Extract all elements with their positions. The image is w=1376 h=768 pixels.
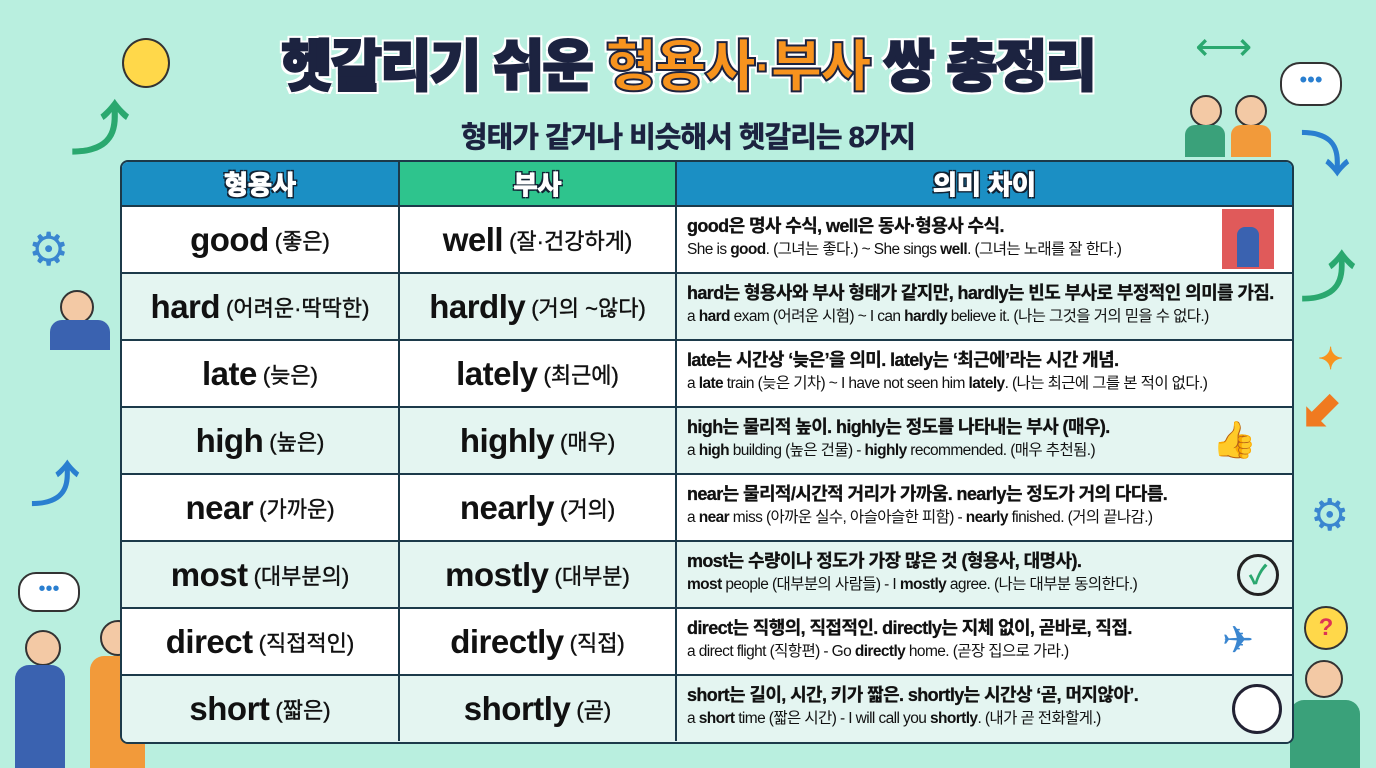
header: meaning: 의미 차이 bbox=[933, 170, 1036, 200]
row: near bbox=[122, 475, 1292, 542]
row: good: (좋은) bbox=[275, 228, 330, 254]
icon: double arrow: ⟷ bbox=[1195, 25, 1252, 69]
row: high bbox=[122, 408, 1292, 475]
icon: clock bbox=[1232, 684, 1282, 734]
row: hard: (거의 ~않다) bbox=[531, 296, 646, 320]
row: near: nearly bbox=[460, 488, 554, 526]
row: good: well bbox=[443, 220, 503, 258]
header: meaning bbox=[677, 162, 1292, 207]
row: late bbox=[122, 341, 1292, 408]
row: short: a short time (짧은 시간) - I will call you shortly. (내가 곧 전화할게.) bbox=[687, 710, 1101, 727]
row: good bbox=[122, 207, 1292, 274]
row: direct: (직접적인) bbox=[259, 630, 354, 656]
icon: check bbox=[1237, 554, 1279, 596]
row: late: (늦은) bbox=[263, 362, 318, 388]
icon: speech bubbles left bbox=[18, 572, 80, 612]
arrow: green curved left: ⤴ bbox=[70, 96, 130, 163]
subtitle: 형태가 같거나 비슷해서 헷갈리는 8가지 bbox=[461, 122, 915, 154]
row: short: (짧은) bbox=[275, 698, 331, 722]
header: adverb bbox=[400, 162, 677, 207]
row: late: late bbox=[202, 354, 257, 392]
header: adjective: 형용사 bbox=[224, 170, 296, 200]
icon: gear right: ⚙ bbox=[1310, 491, 1349, 540]
row: most: (대부분의) bbox=[254, 564, 349, 588]
title: 헷갈리기 쉬운 형용사·부사 쌍 총정리 bbox=[281, 35, 1095, 98]
icon: question bubble: ? bbox=[1319, 614, 1333, 641]
header: adjective bbox=[122, 162, 400, 207]
arrow: green right: ⤴ bbox=[1300, 246, 1356, 309]
row: direct: directly bbox=[450, 622, 564, 660]
row: high: (높은) bbox=[269, 430, 324, 454]
row: late: lately bbox=[456, 354, 538, 392]
row: short: short는 길이, 시간, 키가 짧은. shortly는 시간상 ‘곧, 머지않아’. bbox=[687, 685, 1138, 705]
row: short: (곧) bbox=[576, 698, 611, 722]
row: direct: direct bbox=[166, 622, 253, 660]
icon: speech bubble bbox=[1280, 62, 1342, 106]
row: near: near bbox=[185, 488, 253, 526]
row: late: a late train (늦은 기차) ~ I have not seen him lately. (나는 최근에 그를 본 적이 없다.) bbox=[687, 375, 1207, 392]
row: high: high bbox=[196, 422, 263, 458]
arrow: blue curved right: ⤵ bbox=[1300, 127, 1350, 183]
row: high: a high building (높은 건물) - highly recommended. (매우 추천됨.) bbox=[687, 442, 1095, 459]
arrow: blue left: ⤴ bbox=[30, 457, 80, 513]
people: bottom left bbox=[15, 620, 145, 768]
people: top right bbox=[1185, 95, 1271, 157]
row: good: (잘·건강하게) bbox=[509, 228, 632, 254]
row: good: good bbox=[190, 220, 269, 258]
row: hard bbox=[122, 274, 1292, 341]
arrow: orange right: ⬋ bbox=[1300, 382, 1342, 438]
icon: singer bbox=[1222, 209, 1274, 269]
row: near: near는 물리적/시간적 거리가 가까움. nearly는 정도가 거의 다다름. bbox=[687, 484, 1167, 504]
icon: question bubble bbox=[1304, 606, 1348, 650]
row: near: (거의) bbox=[560, 496, 615, 522]
row: hard: hard bbox=[151, 288, 220, 324]
row: high: (매우) bbox=[560, 430, 615, 454]
row: direct: a direct flight (직항편) - Go directly home. (곧장 집으로 가라.) bbox=[687, 643, 1069, 660]
icon: light bulb bbox=[122, 38, 170, 88]
row: most: most는 수량이나 정도가 가장 많은 것 (형용사, 대명사). bbox=[687, 551, 1081, 571]
row: most bbox=[122, 542, 1292, 609]
person: bottom right bbox=[1290, 660, 1360, 768]
row: hard: hard는 형용사와 부사 형태가 같지만, hardly는 빈도 부사로 부정적인 의미를 가짐. bbox=[687, 283, 1274, 303]
row: hard: (어려운·딱딱한) bbox=[226, 296, 369, 320]
row: hard: a hard exam (어려운 시험) ~ I can hardly believe it. (나는 그것을 거의 믿을 수 없다.) bbox=[687, 308, 1209, 325]
icon: sparkle: ✦ bbox=[1318, 343, 1343, 376]
row: good: good은 명사 수식, well은 동사·형용사 수식. bbox=[687, 216, 1004, 236]
person: left studying bbox=[50, 290, 110, 350]
table bbox=[120, 160, 1294, 744]
row: most: most bbox=[171, 556, 248, 592]
row: late: late는 시간상 ‘늦은’을 의미. lately는 ‘최근에’라는 시간 개념. bbox=[687, 350, 1118, 370]
row: high: highly bbox=[460, 422, 554, 458]
icon: check: ✓ bbox=[1249, 560, 1267, 590]
row: most: (대부분) bbox=[554, 564, 630, 588]
row: short: short bbox=[189, 690, 269, 726]
row: direct bbox=[122, 609, 1292, 676]
icon: airplane: ✈ bbox=[1222, 620, 1254, 662]
row: most: mostly bbox=[445, 556, 548, 592]
row: hard: hardly bbox=[429, 288, 525, 324]
row: late: (최근에) bbox=[544, 362, 619, 388]
icon: speech bubble: ••• bbox=[1299, 67, 1323, 92]
row: short bbox=[122, 676, 1292, 743]
row: direct: direct는 직행의, 직접적인. directly는 지체 없이, 곧바로, 직접. bbox=[687, 618, 1132, 638]
icon: thumbs up: 👍 bbox=[1212, 419, 1257, 460]
header: adverb: 부사 bbox=[514, 170, 561, 200]
row: high: high는 물리적 높이. highly는 정도를 나타내는 부사 (매우). bbox=[687, 417, 1110, 437]
row: most: most people (대부분의 사람들) - I mostly agree. (나는 대부분 동의한다.) bbox=[687, 576, 1137, 593]
row: near: a near miss (아까운 실수, 아슬아슬한 피함) - nearly finished. (거의 끝나감.) bbox=[687, 509, 1152, 526]
icon: speech bubbles left: ••• bbox=[38, 578, 60, 600]
row: good: She is good. (그녀는 좋다.) ~ She sings well. (그녀는 노래를 잘 한다.) bbox=[687, 241, 1121, 258]
row: near: (가까운) bbox=[259, 496, 335, 522]
row: direct: (직접) bbox=[570, 630, 625, 656]
row: short: shortly bbox=[464, 690, 570, 726]
icon: gear: ⚙ bbox=[28, 223, 69, 275]
